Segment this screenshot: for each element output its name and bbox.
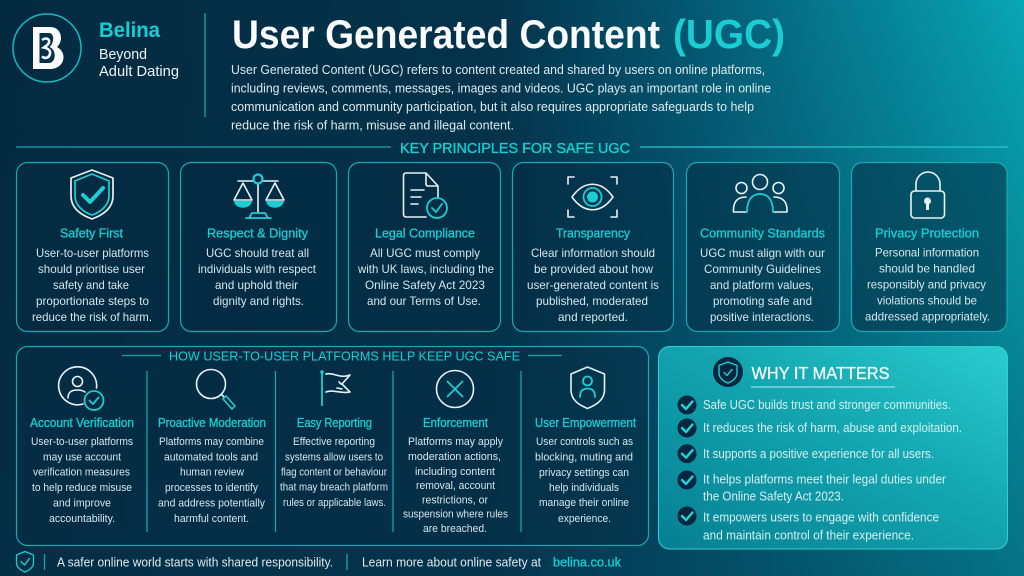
check list: Safe UGC builds trust and stronger communities.: [703, 398, 951, 412]
icon: scales: [234, 174, 284, 218]
body text: and improve: [53, 497, 111, 509]
check list: and maintain control of their experience.: [703, 528, 914, 542]
title: (UGC): [673, 11, 785, 57]
panel: why it matters: [658, 346, 1008, 549]
body text: [158, 436, 265, 525]
body text: [198, 246, 317, 308]
icon: shield user: [571, 367, 604, 408]
panel: transparency: Transparency: [556, 226, 631, 240]
body text: [535, 436, 633, 525]
body text: dignity and rights.: [213, 294, 304, 308]
body text: to help reduce misuse: [32, 482, 132, 494]
body text: systems allow users to: [285, 451, 383, 463]
body text: safety and take: [53, 278, 129, 292]
body text: blocking, muting and: [535, 452, 633, 464]
body text: may use account: [43, 452, 121, 464]
body text: should be handled: [879, 262, 975, 276]
panel: how platforms help: [16, 346, 648, 546]
column: enforcement: Enforcement: [423, 416, 488, 430]
logo: Belina: [13, 14, 179, 82]
panel: legal compliance: Legal Compliance: [375, 226, 475, 240]
intro paragraph: including reviews, comments, messages, images and videos. UGC plays an important role in online: [231, 80, 771, 96]
body text: [31, 436, 133, 525]
body text: accountability.: [49, 513, 115, 525]
icon: footer shield: [16, 552, 34, 572]
body text: and platform values,: [710, 278, 814, 292]
body text: privacy settings can: [539, 467, 629, 479]
body text: with UK laws, including the: [357, 262, 494, 276]
body text: [527, 246, 659, 324]
body text: [865, 246, 990, 324]
body text: [403, 436, 508, 535]
body text: and reported.: [558, 310, 628, 324]
body text: User controls such as: [536, 436, 633, 448]
intro paragraph: User Generated Content (UGC) refers to content created and shared by users on online platforms,: [231, 62, 765, 77]
icon: people: [733, 174, 787, 212]
body text: violations should be: [877, 294, 977, 308]
check list: It supports a positive experience for all users.: [703, 447, 934, 461]
check list: It empowers users to engage with confidence: [703, 511, 939, 525]
body text: including content: [415, 466, 495, 478]
body text: processes to identify: [165, 482, 258, 494]
body text: rules or applicable laws.: [283, 497, 386, 509]
body text: [700, 246, 825, 324]
column: account verification: Account Verification: [30, 416, 134, 430]
body text: User-to-user platforms: [31, 436, 133, 448]
footer strip: A safer online world starts with shared responsibility.: [57, 554, 333, 570]
icon: shield badge: [713, 357, 743, 387]
body text: and uphold their: [215, 278, 298, 292]
body text: proportionate steps to: [36, 294, 149, 308]
body text: verification measures: [33, 467, 130, 479]
check list: [678, 396, 962, 542]
heading: HOW USER-TO-USER PLATFORMS HELP KEEP UGC SAFE: [169, 348, 520, 364]
body text: Effective reporting: [293, 436, 375, 448]
column: enforcement: [403, 370, 508, 535]
check list: It reduces the risk of harm, abuse and exploitation.: [703, 421, 962, 435]
section heading: key principles: KEY PRINCIPLES FOR SAFE UGC: [400, 141, 630, 157]
icon: flag: [320, 370, 350, 406]
title: User Generated Content: [232, 13, 660, 57]
body text: human review: [180, 467, 244, 479]
body text: All UGC must comply: [370, 246, 480, 260]
heading: WHY IT MATTERS: [752, 363, 890, 383]
body text: harmful content.: [174, 513, 249, 525]
icon: x circle: [436, 370, 474, 408]
body text: help individuals: [549, 482, 619, 494]
body text: that may breach platform: [280, 482, 388, 494]
panel: privacy protection: [852, 162, 1007, 332]
body text: UGC should treat all: [206, 246, 309, 260]
column: proactive moderation: [158, 370, 266, 525]
panel: transparency: [512, 162, 674, 332]
body text: [32, 246, 152, 324]
body text: positive interactions.: [710, 310, 814, 324]
body text: [357, 246, 494, 308]
body text: Online Safety Act 2023: [365, 278, 485, 292]
check list: It helps platforms meet their legal duties under: [703, 473, 946, 487]
icon: padlock: [911, 172, 944, 218]
panel: community standards: [686, 162, 840, 332]
panel: respect and dignity: Respect & Dignity: [207, 226, 309, 240]
body text: UGC must align with our: [700, 246, 825, 260]
column: easy reporting: [280, 370, 388, 509]
body text: Platforms may combine: [159, 436, 264, 448]
column: proactive moderation: Proactive Moderation: [158, 416, 266, 430]
body text: be provided about how: [534, 262, 653, 276]
body text: promoting safe and: [713, 294, 812, 308]
icon: document check: [404, 173, 447, 218]
body text: automated tools and: [164, 452, 258, 464]
body text: and address potentially: [158, 497, 265, 509]
icon: eye in frame: [568, 177, 617, 217]
panel: community standards: Community Standards: [700, 226, 825, 240]
column: easy reporting: Easy Reporting: [297, 416, 372, 430]
body text: addressed appropriately.: [865, 310, 990, 324]
panel: legal compliance: [348, 162, 500, 332]
body text: [280, 436, 388, 509]
check list: the Online Safety Act 2023.: [703, 490, 844, 504]
panel: safety first: [16, 162, 168, 332]
body text: individuals with respect: [198, 262, 317, 276]
body text: published, moderated: [536, 294, 648, 308]
body text: flag content or behaviour: [281, 467, 387, 479]
body text: User-to-user platforms: [36, 246, 149, 260]
body text: should prioritise user: [38, 262, 145, 276]
logo: Belina: Belina: [99, 19, 160, 42]
body text: manage their online: [539, 497, 629, 509]
logo: Belina: Beyond: [99, 47, 147, 63]
icon: user verified: [59, 367, 104, 410]
body text: are breached.: [423, 523, 487, 535]
body text: Community Guidelines: [704, 262, 821, 276]
footer strip: Learn more about online safety at: [362, 554, 541, 570]
intro paragraph: reduce the risk of harm, misuse and illegal content.: [231, 118, 514, 132]
intro paragraph: communication and community participation, but it also requires appropriate safeguards to help: [231, 99, 754, 114]
icon: shield check: [71, 170, 113, 219]
column: user empowerment: [535, 367, 636, 525]
body text: removal, account: [416, 480, 495, 492]
body text: and our Terms of Use.: [367, 294, 481, 308]
body text: user-generated content is: [527, 278, 659, 292]
panel: respect and dignity: [180, 162, 336, 332]
body text: experience.: [558, 513, 611, 525]
panel: safety first: Safety First: [60, 226, 124, 240]
body text: Personal information: [875, 246, 979, 260]
column: user empowerment: User Empowerment: [535, 416, 636, 430]
icon: magnifier: [196, 370, 235, 409]
intro paragraph: [231, 62, 771, 132]
footer strip: belina.co.uk: [553, 554, 621, 570]
body text: Clear information should: [531, 246, 655, 260]
body text: moderation actions,: [408, 451, 501, 463]
logo: Belina: Adult Dating: [99, 64, 179, 80]
body text: restrictions, or: [422, 494, 488, 506]
body text: reduce the risk of harm.: [32, 310, 152, 324]
body text: suspension where rules: [403, 508, 508, 520]
column: account verification: [30, 367, 134, 525]
body text: Platforms may apply: [408, 436, 503, 448]
panel: privacy protection: Privacy Protection: [875, 226, 979, 240]
body text: responsibly and privacy: [867, 278, 986, 292]
footer strip: [16, 552, 621, 572]
